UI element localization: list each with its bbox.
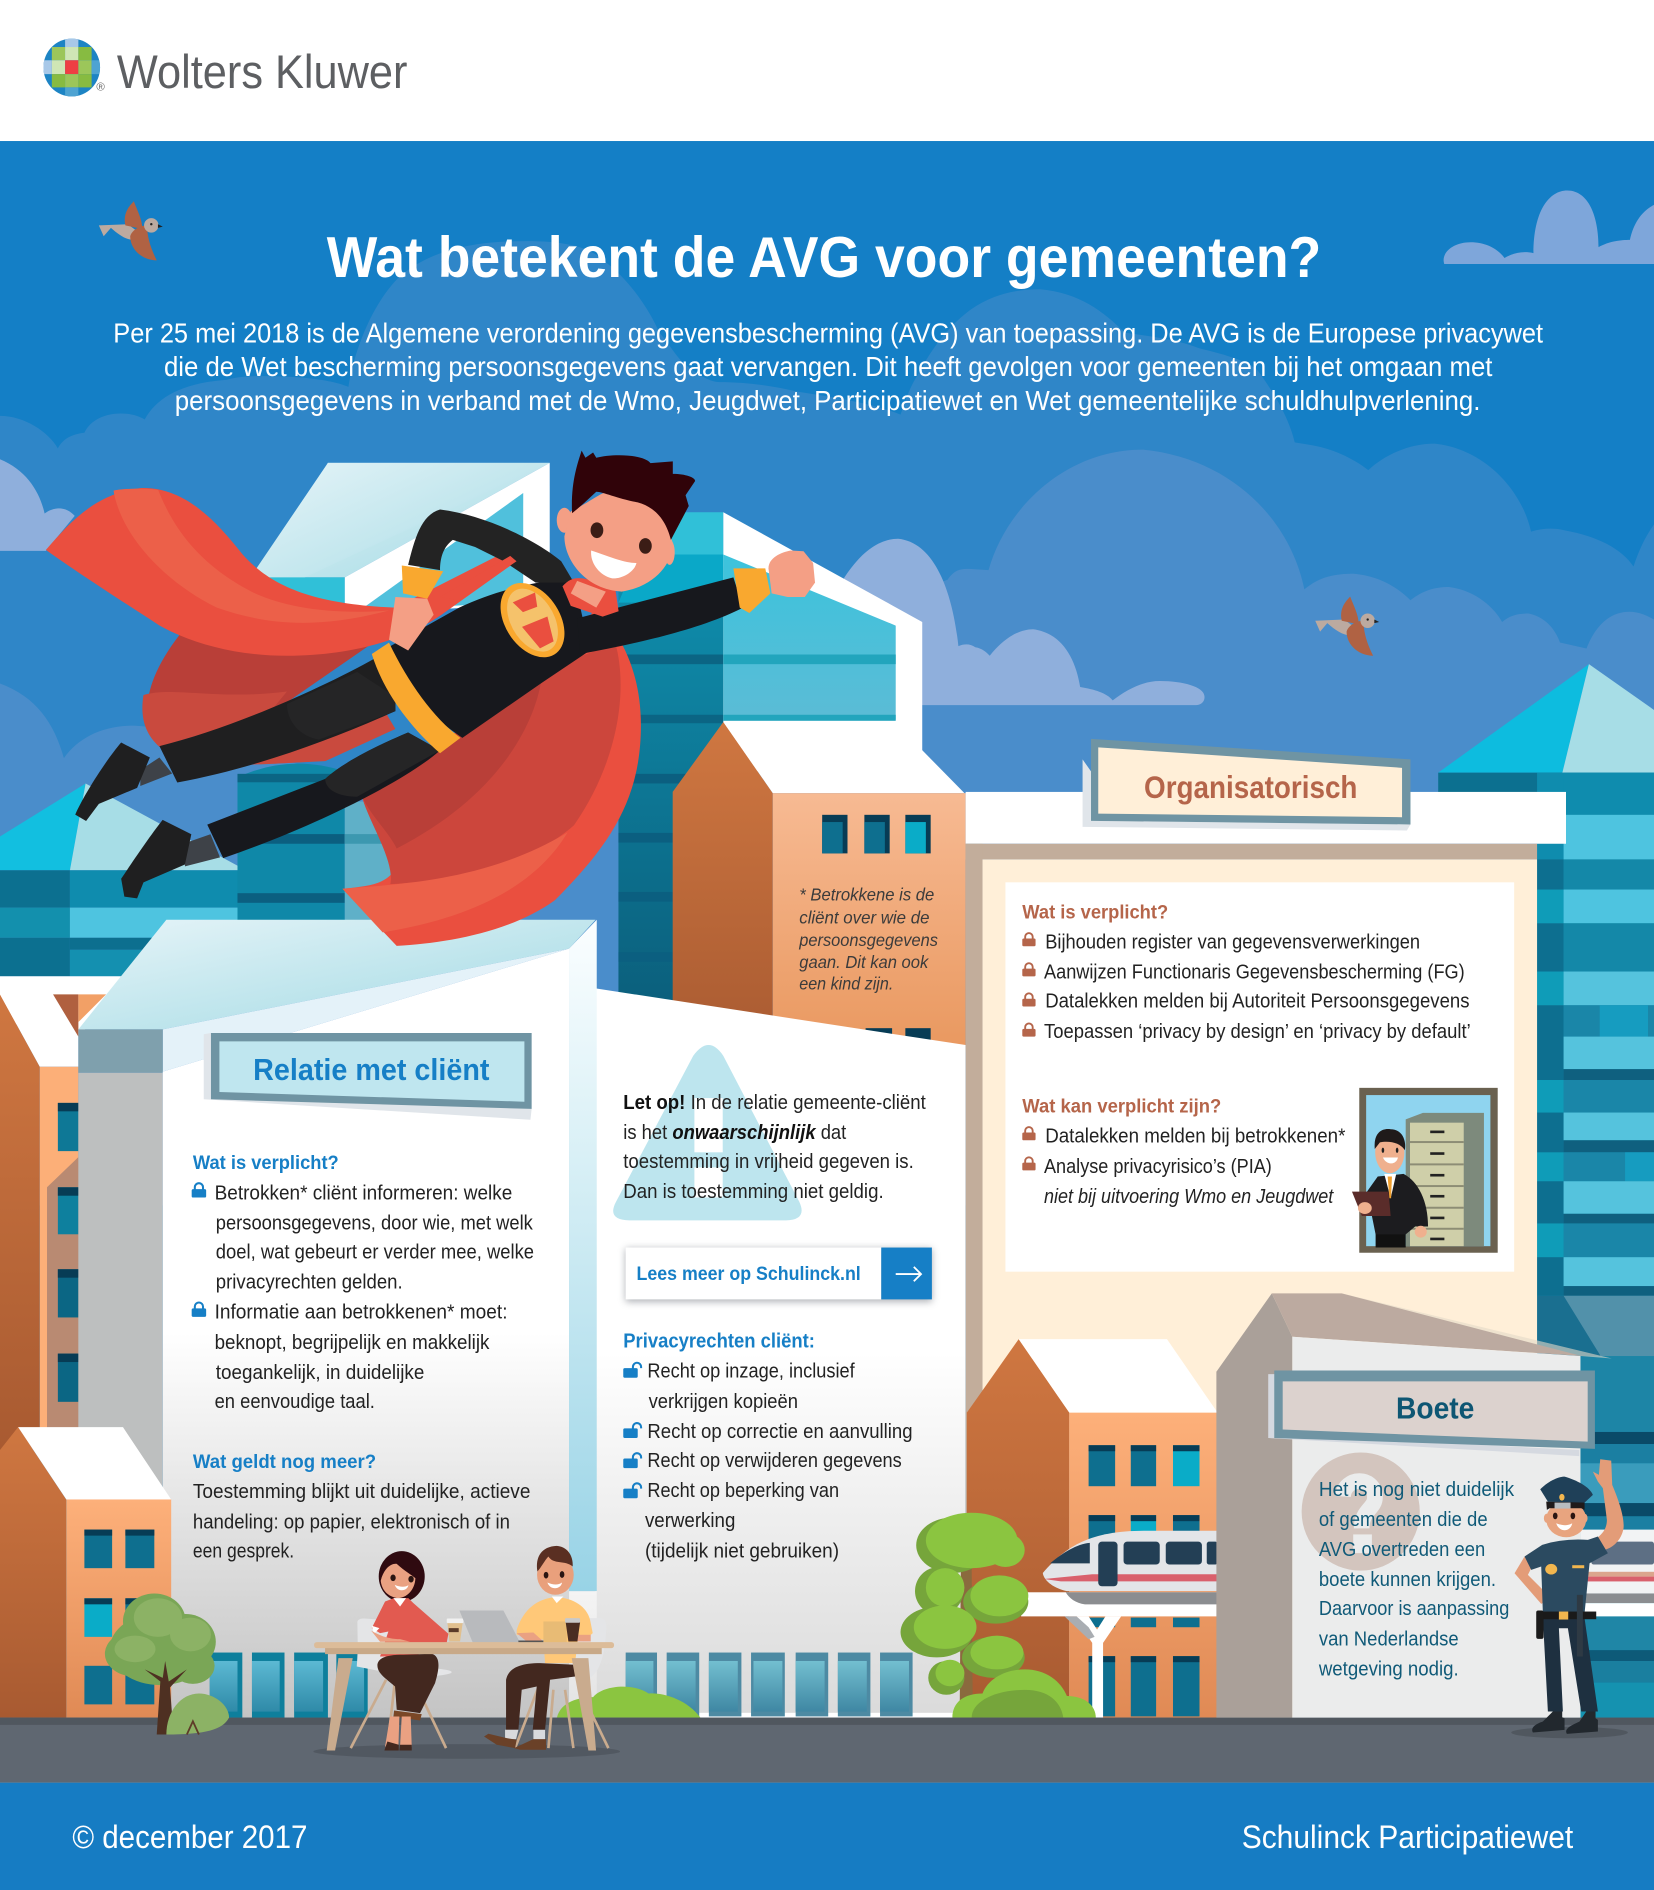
cloud layer: far [0,241,1654,1205]
cape strap [440,556,517,601]
text: boete: Het is nog niet duidelijk [1319,1479,1514,1501]
building: right tower [1438,664,1654,1718]
building: peach centre [673,722,966,1061]
cape: upper layer [46,488,517,656]
text: toestemming: een gesprek. [193,1540,294,1562]
list: verplicht organisatie: Aanwijzen Functionaris Gegevensbescherming (FG) [1044,962,1465,984]
heading: wat kan verplicht zijn: Wat kan verplicht zijn? [1022,1097,1221,1118]
text: let op: toestemming in vrijheid gegeven is. [623,1151,914,1173]
header background [0,0,1654,141]
illustration: man at filing cabinet [1352,1088,1498,1253]
sign: Relatie met cliënt: Relatie met cliënt [253,1054,489,1087]
list: privacyrechten: Recht op inzage, inclusief [647,1361,855,1383]
building: far-left tower [0,783,248,1025]
bush: left tree base [166,1694,229,1735]
icons: unlocks [623,1363,641,1498]
logo wordmark: Wolters Kluwer [117,45,407,98]
text: boete: AVG overtreden een [1319,1539,1485,1561]
list: verplicht organisatie: Datalekken melden bij Autoriteit Persoonsgegevens [1045,991,1470,1013]
list: verplicht organisatie [1044,932,1471,1043]
cape: under layer [142,634,395,765]
footnote: gaan. Dit kan ook [799,952,929,972]
list: privacyrechten: verwerking [645,1510,735,1532]
footnote: persoonsgegevens [798,930,938,950]
cape: lower layer [342,608,641,946]
building: beige organisatie wall [966,739,1566,1718]
building: tower behind hero left [237,764,393,940]
panel: organisatorisch content [1005,882,1514,1272]
cloud: centre light [820,539,1205,705]
hero boots [75,743,220,898]
list: verplicht organisatie: Toepassen ‘privacy by design’ en ‘privacy by default’ [1044,1021,1471,1043]
text: let op: Dan is toestemming niet geldig. [623,1181,884,1203]
hero legs [159,658,440,858]
icons: locks brown [1022,933,1036,1170]
building: orange house behind monorail [967,1339,1218,1718]
cloud: top right [1444,190,1654,264]
building: Boete [1216,1293,1612,1718]
heading: wat geldt nog meer: Wat geldt nog meer? [193,1452,376,1473]
list: privacyrechten: verkrijgen kopieën [649,1391,798,1413]
shadow [313,1744,620,1759]
building: far-left house behind [0,976,133,1452]
list: verplicht relatie: privacyrechten gelden. [216,1272,403,1294]
list: verplicht relatie: Betrokken* cliënt informeren: welke [215,1182,512,1204]
windows: relatie bottom [210,1653,368,1720]
list: privacyrechten: (tijdelijk niet gebruiken) [645,1540,839,1562]
text: boete: Daarvoor is aanpassing [1319,1598,1509,1620]
windows [822,815,931,1043]
text: boete: van Nederlandse [1319,1628,1459,1650]
road [0,1718,1654,1783]
text: boete: of gemeenten die de [1319,1509,1488,1531]
cloud layer: middle [0,450,1654,1205]
footnote: * Betrokkene is de [799,884,935,904]
building: front-left house [0,1427,171,1718]
bird: right [1315,597,1379,656]
footer: date: © december 2017 [72,1819,307,1855]
hero belt [372,643,460,753]
hero: superhero [46,451,815,946]
panel: centre [596,988,966,1718]
footer: brand: Schulinck Participatiewet [1242,1819,1573,1855]
list: privacyrechten: Recht op correctie en aanvulling [647,1421,913,1443]
sign: Boete: Boete [1396,1393,1474,1426]
button: lees meer [626,1248,932,1302]
cloud: left light [0,459,75,551]
list: kan verplicht: niet bij uitvoering Wmo en Jeugdwet [1044,1186,1335,1208]
icons: locks blue [192,1183,206,1317]
hero torso [376,579,590,738]
list: verplicht relatie: Informatie aan betrokkenen* moet: [215,1302,508,1324]
hero emblem [490,580,575,661]
coffee cups [447,1618,580,1641]
list: verplicht relatie: en eenvoudige taal. [215,1391,375,1413]
man [484,1546,608,1750]
illustration: police officer [1511,1459,1628,1738]
tree: centre [901,1513,1028,1724]
illustration: people at table [313,1546,620,1759]
footnote: cliënt over wie de [799,907,930,927]
intro text: Per 25 mei 2018 is de Algemene verordening gegevensbescherming (AVG) van toepassing. De AVG is de Europese privacywet [113,317,1543,348]
hero arm bent [389,510,574,650]
list: kan verplicht [1044,1126,1346,1208]
list: privacyrechten: Recht op beperking van [647,1480,839,1502]
intro text [113,317,1543,416]
laptop [459,1610,543,1643]
panel: Relatie met cliënt building [78,920,597,1720]
list: privacyrechten: Recht op verwijderen gegevens [647,1450,902,1472]
bush: under table right [557,1687,700,1718]
sign: Organisatorisch [1083,739,1410,830]
icon: question mark circle [1302,1452,1420,1571]
text: let op: is het onwaarschijnlijk dat [623,1122,847,1144]
list: privacyrechten [645,1361,913,1562]
text: toestemming: Toestemming blijkt uit duidelijke, actieve [193,1481,530,1503]
icon: logo globe [43,39,101,97]
list: verplicht relatie: toegankelijk, in duidelijke [216,1362,424,1384]
hero arm outstretched [577,551,815,654]
heading: privacyrechten: Privacyrechten cliënt: [623,1331,815,1353]
list: verplicht relatie [215,1182,534,1413]
icon: warning triangle [613,1045,802,1220]
footnote [798,884,938,994]
text: boete: wetgeving nodig. [1318,1658,1459,1680]
list: verplicht organisatie: Bijhouden register van gegevensverwerkingen [1045,932,1420,954]
building: main tower right of hero [618,512,922,1006]
list: verplicht relatie: beknopt, begrijpelijk en makkelijk [215,1332,490,1354]
tree: left [105,1593,229,1735]
text: let op: Let op! In de relatie gemeente-cliënt [623,1092,926,1114]
text: toestemming [193,1481,530,1562]
footnote: een kind zijn. [799,974,893,994]
sign: Relatie met cliënt [204,1033,532,1120]
sign: Boete [1268,1370,1595,1456]
monorail: train and track [1021,1531,1218,1718]
sign: Organisatorisch: Organisatorisch [1144,770,1357,805]
hero head [557,451,695,592]
text: boete [1318,1479,1514,1680]
sky clouds [0,190,1654,1205]
table [314,1642,614,1750]
heading: wat is verplicht (relatie): Wat is verplicht? [193,1153,339,1174]
windows: centre bottom [597,1653,966,1718]
title: Wat betekent de AVG voor gemeenten? [327,226,1321,290]
text: toestemming: handeling: op papier, elektronisch of in [193,1511,510,1533]
footer background [0,1783,1654,1890]
heading: wat is verplicht (organisatie): Wat is verplicht? [1022,902,1168,923]
building: pale tower with diagonal roof [250,463,550,626]
logo: Wolters Kluwer [43,39,407,98]
list: kan verplicht: Analyse privacyrisico’s (PIA) [1044,1156,1272,1178]
trademark: ® [96,81,105,93]
bush: right of centre tree [952,1669,1096,1718]
list: kan verplicht: Datalekken melden bij betrokkenen* [1045,1126,1346,1148]
intro text: persoonsgegevens in verband met de Wmo, Jeugdwet, Participatiewet en Wet gemeentelijke schuldhulpverlening. [175,385,1480,416]
list: verplicht relatie: doel, wat gebeurt er verder mee, welke [216,1241,534,1263]
button: lees meer: Lees meer op Schulinck.nl [637,1264,861,1285]
woman [351,1551,452,1750]
monorail: right section [1580,1530,1654,1616]
text: boete: boete kunnen krijgen. [1319,1569,1496,1591]
hero collar [562,578,619,617]
intro text: die de Wet bescherming persoonsgegevens gaat vervangen. Dit heeft gevolgen voor gemeenten bij het omgaan met [164,351,1493,382]
list: verplicht relatie: persoonsgegevens, door wie, met welk [216,1212,533,1234]
bird: top left [99,201,163,260]
text: let op [623,1092,926,1203]
